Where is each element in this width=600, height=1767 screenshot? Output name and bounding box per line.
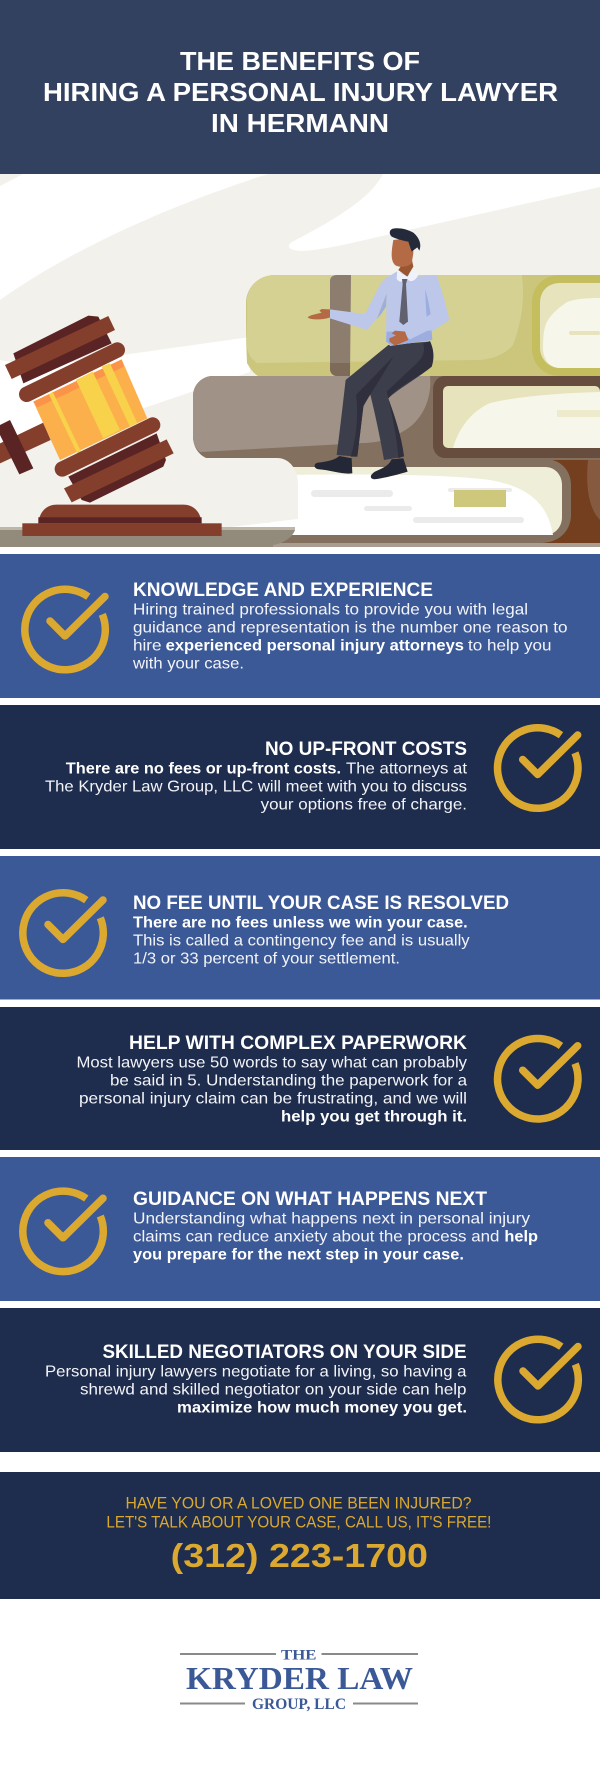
header banner [0,0,600,174]
logo: The Kryder Law Group, LLC [180,1647,418,1713]
heading: KNOWLEDGE AND EXPERIENCE [133,580,433,601]
body text: maximize how much money you get. [177,1399,467,1416]
ground strip [0,527,295,547]
panel: knowledge and experience [0,554,600,698]
body text: guidance and representation is the number one reason to [133,620,568,636]
body text: Hiring trained professionals to provide you with legal [133,602,528,618]
book: bottom [250,458,600,547]
body text [45,760,468,813]
body text: to help you [468,638,552,654]
book: middle [193,376,600,460]
panel: no fee until your case is resolved [0,856,600,1000]
icon: check circle [23,1191,103,1272]
logo: The Kryder Law Group, LLC: THE [281,1647,316,1663]
heading: NO UP-FRONT COSTS [265,739,467,760]
heading: HELP WITH COMPLEX PAPERWORK [129,1033,467,1054]
heading: SKILLED NEGOTIATORS ON YOUR SIDE [102,1342,466,1363]
body text: There are no fees or up-front costs. [66,760,341,777]
body text: This is called a contingency fee and is usually [133,932,470,949]
body text [133,1210,538,1263]
panel: help with complex paperwork [0,1007,600,1150]
illustration: lawyer sitting on law books beside a gavel [0,174,600,547]
call to action text: LET'S TALK ABOUT YOUR CASE, CALL US, IT'S FREE! [106,1512,491,1531]
icon: check circle [498,1339,578,1420]
title: HIRING A PERSONAL INJURY LAWYER [43,77,558,107]
gavel [0,316,222,536]
body text: help you get through it. [281,1108,467,1125]
icon: check circle [25,589,105,670]
body text: The Kryder Law Group, LLC will meet with you to discuss [45,778,467,795]
book: top [246,275,600,376]
body text: shrewd and skilled negotiator on your side can help [80,1381,467,1398]
body text: hire [133,638,162,654]
body text: with your case. [132,656,244,672]
logo: The Kryder Law Group, LLC: GROUP, LLC [252,1696,346,1713]
body text: The attorneys at [346,760,468,777]
body text: help [504,1228,538,1245]
panel: skilled negotiators on your side [0,1308,600,1452]
body text: There are no fees unless we win your case. [133,914,468,931]
body text: Understanding what happens next in personal injury [133,1210,530,1227]
body text: experienced personal injury attorneys [166,638,464,654]
icon: check circle [23,893,103,973]
icon: check circle [498,728,578,808]
body text: Personal injury lawyers negotiate for a living, so having a [45,1363,467,1380]
logo: The Kryder Law Group, LLC: KRYDER LAW [186,1660,413,1696]
body text: Most lawyers use 50 words to say what can probably [76,1054,467,1071]
body text: personal injury claim can be frustrating, and we will [79,1090,467,1107]
body text [133,914,470,967]
panel: no up-front costs [0,705,600,849]
call to action text [106,1493,491,1531]
title: THE BENEFITS OF [180,46,420,76]
icon: check circle [498,1039,578,1119]
body text [45,1363,467,1416]
phone number: (312) 223-1700 [171,1537,428,1574]
heading: GUIDANCE ON WHAT HAPPENS NEXT [133,1189,487,1210]
body text [76,1054,467,1125]
body text [132,602,568,672]
call to action text: HAVE YOU OR A LOVED ONE BEEN INJURED? [126,1493,472,1512]
lawyer figure [308,228,449,479]
body text: 1/3 or 33 percent of your settlement. [133,950,400,967]
page block edge [205,458,298,528]
panel: call to action [0,1472,600,1599]
panel: guidance on what happens next [0,1157,600,1301]
body text: claims can reduce anxiety about the process and [133,1228,499,1245]
body text: be said in 5. Understanding the paperwork for a [110,1072,467,1089]
body text: your options free of charge. [261,796,467,813]
title [43,46,558,138]
title: IN HERMANN [211,108,389,138]
body text: you prepare for the next step in your case. [133,1246,464,1263]
heading: NO FEE UNTIL YOUR CASE IS RESOLVED [133,893,509,914]
